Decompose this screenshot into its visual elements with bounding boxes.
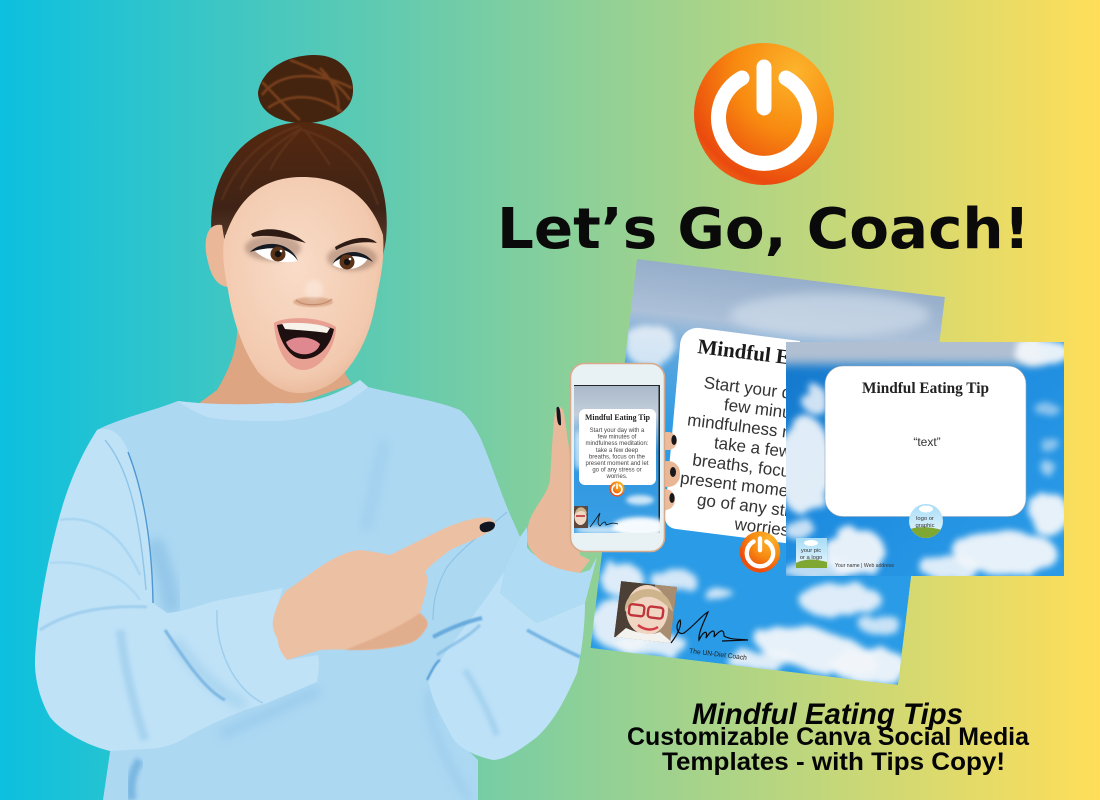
ear [206, 225, 232, 287]
screen tip panel [579, 409, 656, 485]
phone screen [574, 385, 660, 533]
sky background [786, 342, 1064, 576]
caption line one: Customizable Canva Social Media [627, 723, 1030, 751]
hair [211, 122, 387, 280]
screen tip text: few minutes of [598, 435, 637, 441]
white text panel [825, 366, 1026, 516]
screen tip text [585, 428, 649, 480]
woman pointing at the phone [35, 55, 597, 800]
caption line two: Templates - with Tips Copy! [662, 748, 1005, 776]
screen signature [590, 513, 618, 527]
signature caption: The UN-Diet Coach [689, 648, 747, 662]
screen title: Mindful Eating Tip [585, 413, 651, 422]
collar [178, 380, 368, 421]
pointing hand [273, 517, 495, 660]
icon: power button [740, 531, 780, 573]
screen tip text: go of any stress or [592, 468, 642, 474]
open mouth [274, 318, 336, 370]
left arm sleeve [35, 429, 319, 751]
eye shadow [245, 235, 377, 271]
right arm sleeve [427, 512, 597, 760]
icon: small power button [609, 481, 625, 497]
picture placeholder [796, 538, 827, 568]
placeholder text: “text” [913, 435, 941, 449]
caption heading: Mindful Eating Tips [692, 698, 963, 731]
product caption [627, 698, 1030, 776]
panel tip text: take a few deep [713, 433, 834, 467]
panel tip text: present moment and let [679, 468, 859, 509]
brand title: Let’s Go, Coach! [497, 197, 1030, 262]
screen tip text: mindfulness meditation: [585, 441, 649, 447]
blank customizable template card [776, 330, 1070, 580]
white tip panel [665, 328, 872, 548]
logo placeholder: graphic [915, 523, 935, 529]
panel tip text: go of any stress or [696, 490, 837, 526]
screen tip text: take a few deep [596, 448, 639, 454]
fingers behind the phone [655, 432, 680, 510]
bun [258, 55, 353, 123]
panel tip text: worries. [733, 514, 795, 541]
panel tip text [674, 372, 871, 548]
eyes [250, 244, 373, 270]
nose [293, 280, 333, 307]
picture placeholder: or a logo [800, 555, 822, 561]
screen portrait [574, 506, 588, 528]
neck [198, 325, 352, 410]
panel tip text: Start your day with a [703, 373, 859, 411]
panel title: Mindful Eating Tip [696, 334, 872, 379]
name and web address: Your name | Web address [835, 563, 894, 569]
sleeve folds [40, 440, 263, 740]
smartphone showing the tip [570, 364, 668, 552]
logo placeholder: logo or [916, 516, 934, 522]
signature [671, 612, 748, 643]
tilted social media card: Mindful Eating Tip [590, 259, 945, 685]
eyebrows [251, 229, 377, 250]
screen tip text: worries. [605, 474, 628, 480]
panel tip text: few minutes of [723, 395, 834, 428]
hand holding phone [527, 407, 590, 573]
phone body [570, 364, 664, 552]
sweater body [97, 380, 520, 800]
screen tip text: present moment and let [585, 461, 649, 467]
panel tip text: mindfulness meditation: [686, 410, 866, 451]
face [223, 177, 383, 393]
body shading [131, 440, 470, 800]
picture placeholder: your pic [801, 548, 821, 554]
panel tip text: breaths, focus on the [691, 450, 851, 489]
logo placeholder [909, 504, 943, 538]
screen tip text: breaths, focus on the [589, 454, 646, 460]
portrait photo [614, 581, 677, 643]
screen tip text: Start your day with a [590, 428, 645, 434]
icon: orange power button logo [694, 43, 834, 185]
sky background [590, 259, 945, 685]
template title: Mindful Eating Tip [862, 379, 989, 397]
